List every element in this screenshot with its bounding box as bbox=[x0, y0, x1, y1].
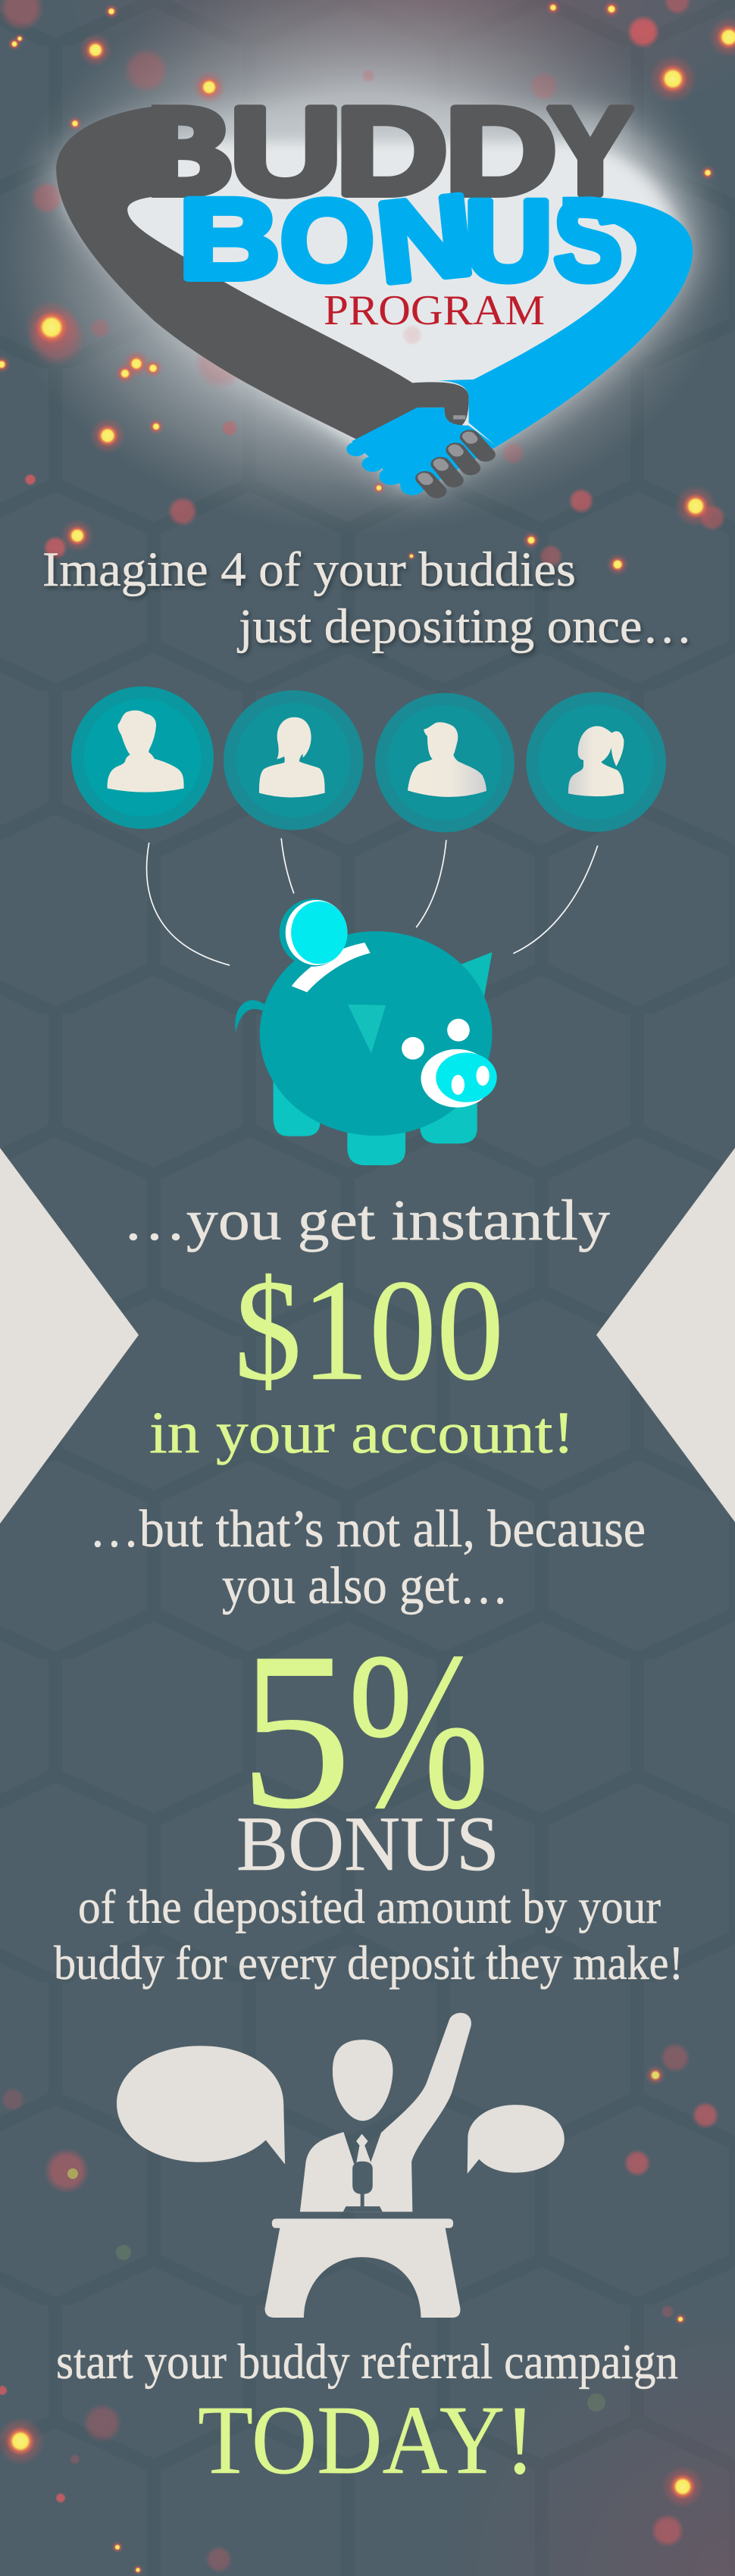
text: of the deposited amount: buddy for every deposit they make! bbox=[54, 1936, 683, 1990]
icon: speaker at podium with speech bubbles bbox=[117, 2013, 565, 2318]
word: BUDDY: D bbox=[336, 82, 448, 220]
word: BUDDY: U bbox=[230, 82, 342, 220]
word: BONUS: N bbox=[371, 171, 479, 307]
icon: piggy bank bbox=[235, 899, 497, 1165]
left speech bubble bbox=[117, 2046, 285, 2165]
speaker head bbox=[333, 2040, 393, 2121]
glowing particles top bbox=[0, 0, 735, 576]
text: but that's not all bbox=[89, 1500, 646, 1615]
coin bbox=[280, 899, 347, 967]
text: but that's not all: you also get… bbox=[222, 1557, 508, 1615]
word: BONUS: U bbox=[464, 177, 552, 304]
word: BONUS: O bbox=[280, 177, 374, 304]
microphone bbox=[343, 2162, 383, 2212]
blue hand bbox=[346, 408, 497, 496]
coin slot bbox=[292, 943, 371, 993]
text: of the deposited amount bbox=[54, 1880, 683, 1990]
heading: imagine 4 of your buddies bbox=[42, 542, 693, 654]
grey arm bbox=[56, 105, 469, 439]
speaker torso and raised arm bbox=[300, 2013, 471, 2212]
text: but that's not all: …but that’s not all, because bbox=[89, 1500, 646, 1558]
word: BUDDY: D bbox=[445, 82, 557, 220]
blue arm bbox=[438, 197, 693, 446]
body bbox=[260, 931, 493, 1136]
number: 5 percent: % bbox=[348, 1606, 489, 1855]
avatar: man 1 bbox=[71, 686, 214, 829]
word: BUDDY: Y bbox=[548, 83, 633, 221]
word: BONUS: S bbox=[554, 177, 622, 305]
avatars row bbox=[71, 686, 666, 833]
left side triangle bbox=[0, 1148, 139, 1524]
word: BONUS bbox=[179, 171, 622, 307]
avatar: man 2 bbox=[375, 693, 514, 833]
call to action: TODAY: TODAY! bbox=[198, 2386, 535, 2495]
podium bbox=[265, 2218, 460, 2318]
glowing particles bottom bbox=[0, 2043, 719, 2575]
text: you get instantly: …you get instantly bbox=[123, 1189, 610, 1252]
number: $100: $100 bbox=[234, 1249, 504, 1411]
heading: imagine 4 of your buddies: just depositing once… bbox=[237, 599, 693, 654]
number: 5 percent bbox=[239, 1606, 489, 1855]
text: start your buddy referral campaign: start your buddy referral campaign bbox=[56, 2334, 678, 2390]
word: BUDDY bbox=[152, 105, 635, 199]
connector lines to piggy bank bbox=[147, 838, 598, 965]
heading: imagine 4 of your buddies: Imagine 4 of your buddies bbox=[42, 542, 576, 597]
ear bbox=[461, 952, 493, 1005]
eyes bbox=[402, 1019, 470, 1060]
word: BONUS: B bbox=[179, 175, 280, 302]
legs bbox=[274, 1074, 477, 1165]
tie bbox=[356, 2134, 371, 2164]
logo glow bbox=[0, 0, 735, 568]
gripping fingers bbox=[424, 415, 486, 491]
word: PROGRAM: PROGRAM bbox=[324, 287, 545, 334]
right side triangle bbox=[596, 1148, 735, 1522]
logo: buddy bonus program bbox=[56, 82, 693, 496]
avatar: woman 2 bbox=[526, 692, 666, 832]
text: in your account: in your account! bbox=[149, 1399, 574, 1465]
right speech bubble bbox=[468, 2105, 565, 2174]
number: 5 percent: 5 bbox=[239, 1606, 352, 1855]
snout bbox=[421, 1049, 497, 1108]
word: BUDDY: B bbox=[122, 82, 234, 220]
word: BONUS: BONUS bbox=[236, 1801, 499, 1887]
avatar: woman 1 bbox=[224, 690, 364, 830]
text: of the deposited amount: of the deposited amount by your bbox=[78, 1880, 661, 1934]
tail bbox=[235, 1000, 265, 1033]
